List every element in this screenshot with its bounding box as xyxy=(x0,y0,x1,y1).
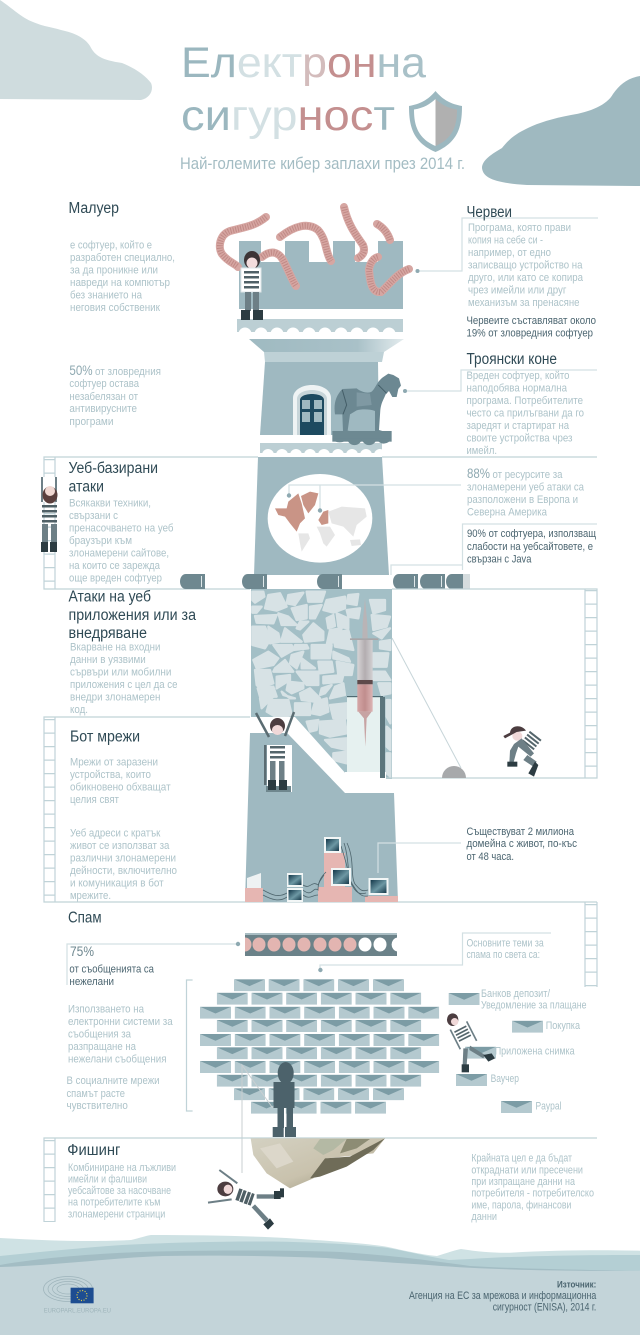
world map xyxy=(268,474,372,563)
text: web attacks: браузъри към xyxy=(69,535,132,547)
person on battlements xyxy=(241,251,263,320)
connector: 75 percent xyxy=(67,942,240,985)
text: 75 percent: от съобщенията са xyxy=(69,964,155,976)
text: 50 percent undetected: 50% xyxy=(69,362,93,378)
text: spam description: електронни системи за xyxy=(68,1016,173,1028)
tower: window and trojan horse floor xyxy=(249,339,404,461)
text: botnets: Уеб адреси с кратък xyxy=(70,828,161,840)
text: worms: Червеи xyxy=(466,204,512,221)
text: 90 percent java: 90% от софтуера, използващ xyxy=(467,528,596,540)
text: web application attacks: внедри злонамерен xyxy=(70,692,160,704)
legend: spam themes: Paypal xyxy=(536,1100,562,1112)
connector: map xyxy=(287,485,461,513)
text: web application attacks: внедряване xyxy=(68,625,147,642)
text: 90 percent java: свързан с Java xyxy=(467,554,532,566)
title xyxy=(181,39,426,140)
icon: trojan horse xyxy=(332,374,401,445)
text: worms: копия на себе си - xyxy=(468,235,543,247)
text: web application attacks: приложения с цел да се xyxy=(70,679,178,691)
text: malware: за да проникне или xyxy=(70,264,158,276)
text: spam themes: спама по света са: xyxy=(466,949,540,961)
connector: worms xyxy=(416,218,598,273)
tower: stone wall xyxy=(245,589,392,793)
text: spam description: разпращане на xyxy=(68,1041,137,1053)
text: botnets: обикновено обхващат xyxy=(70,782,171,794)
text: trojan horses: програма. Потребителите xyxy=(466,395,583,407)
text: 88 percent resources: от ресурсите за xyxy=(492,469,563,481)
icon: syringe xyxy=(350,598,378,747)
person on ladder upside down xyxy=(41,477,58,552)
text: 50 percent undetected: програми xyxy=(69,416,114,428)
text: web application attacks xyxy=(68,589,196,716)
text: web attacks xyxy=(68,460,174,585)
text: botnets: Мрежи от заразени xyxy=(70,757,158,769)
text: web attacks: пренасочването на уеб xyxy=(69,523,174,535)
text: worms: например, от едно xyxy=(468,247,551,259)
text: spam description: Използването на xyxy=(68,1004,145,1016)
text: web application attacks: Атаки на уеб xyxy=(68,589,151,606)
legend: spam themes: Уведомление за плащане xyxy=(481,1000,586,1012)
text: web application attacks: Вкарване на входни xyxy=(70,642,160,654)
pale panel xyxy=(347,696,385,778)
text: web attacks: свързани с xyxy=(69,510,118,522)
text: trojan horses xyxy=(466,351,584,457)
icon: shield xyxy=(409,91,462,152)
bullet row xyxy=(180,565,470,589)
connector: spam themes xyxy=(318,933,551,972)
text: botnets: Бот мрежи xyxy=(70,729,140,746)
text: phishing: на потребителите към xyxy=(68,1197,160,1209)
text: web attacks: още вреден софтуер xyxy=(69,573,162,585)
text: phishing: Комбиниране на лъжливи xyxy=(68,1162,176,1174)
tower: botnet floor xyxy=(245,712,398,902)
footer waves xyxy=(0,1235,640,1335)
frame: phishing xyxy=(44,1138,597,1222)
title: Електронна xyxy=(181,39,426,87)
computers and wires xyxy=(245,837,398,902)
text: phishing: Фишинг xyxy=(67,1142,121,1159)
icon: window xyxy=(293,385,331,435)
frame: botnets xyxy=(44,717,597,902)
text: worms: Програма, която прави xyxy=(468,222,571,234)
text: domains xyxy=(466,826,577,863)
text: 50 percent undetected: от зловредния xyxy=(95,366,161,378)
text: 50 percent undetected: антивирусните xyxy=(69,403,137,415)
text: phishing goal: потребителя - потребителско xyxy=(471,1188,594,1200)
running person xyxy=(503,726,543,777)
text: web application attacks: данни в уязвими xyxy=(70,654,146,666)
text: malware xyxy=(68,200,175,314)
text: botnets: и комуникация в бот xyxy=(70,878,164,890)
text: web attacks: на които се зарежда xyxy=(69,560,161,572)
text: web attacks: Уеб-базирани xyxy=(68,460,158,477)
text: trojan horses: Троянски коне xyxy=(466,351,557,368)
text: 50 percent undetected: софтуер остава xyxy=(69,378,140,390)
text: worms xyxy=(466,204,596,340)
text: phishing goal: данни xyxy=(471,1211,497,1223)
text: worms: друго, или като се копира xyxy=(468,272,584,284)
text: phishing goal: име, парола, финансови xyxy=(471,1199,571,1211)
text: botnets: мрежите. xyxy=(70,890,111,902)
legend: spam themes: Банков депозит/ xyxy=(481,988,551,1000)
text: spam description: спамът расте xyxy=(66,1088,125,1100)
text: 88 percent resources: 88% xyxy=(467,465,490,481)
legend: spam themes: Ваучер xyxy=(491,1073,519,1085)
text: spam description: нежелани съобщения xyxy=(68,1054,167,1066)
rock xyxy=(251,1138,385,1188)
text: worms: Червеите съставляват около xyxy=(466,315,596,327)
text: malware: е софтуер, който е xyxy=(70,240,152,252)
rope xyxy=(242,1065,273,1173)
text: worms: чрез имейли или друг xyxy=(468,284,566,296)
text: malware: Малуер xyxy=(68,200,119,217)
text: web application attacks: код. xyxy=(70,704,88,716)
text: trojan horses: своите устройства чрез xyxy=(466,433,572,445)
text: web application attacks: приложения или за xyxy=(68,607,196,624)
climbing person xyxy=(447,1013,495,1072)
title: сигурност xyxy=(181,92,395,140)
text: phishing xyxy=(67,1142,176,1220)
text: trojan horses: често са прилъгвани да го xyxy=(466,408,584,420)
text: source: сигурност (ENISA), 2014 г. xyxy=(493,1301,596,1313)
subtitle: Най-големите кибер заплахи през 2014 г. xyxy=(180,154,465,173)
logo: European Parliament xyxy=(44,1276,111,1314)
text: phishing goal: при изпращане данни на xyxy=(471,1176,576,1188)
text: trojan horses: имейл. xyxy=(466,445,497,457)
text: 90 percent java xyxy=(462,524,597,570)
envelope wall xyxy=(200,979,439,1114)
falling person xyxy=(208,1170,284,1230)
text: source xyxy=(409,1279,597,1313)
text: spam description xyxy=(66,1004,173,1112)
frame: web application attacks xyxy=(386,589,597,778)
text: botnets: различни злонамерени xyxy=(70,853,176,865)
connector: trojans xyxy=(403,370,597,393)
text: spam themes xyxy=(466,938,544,961)
text: domains: Съществуват 2 милиона xyxy=(466,826,575,838)
text: 50 percent undetected xyxy=(69,362,161,428)
text: web attacks: злонамерени сайтове, xyxy=(69,548,169,560)
bracket xyxy=(186,980,193,1111)
text: 88 percent resources: разположени в Европа и xyxy=(467,494,578,506)
text: malware: навреди на компютър xyxy=(70,277,170,289)
legend: spam themes: Приложена снимка xyxy=(495,1045,575,1057)
text: domains: от 48 часа. xyxy=(466,851,514,863)
text: spam description: В социалните мрежи xyxy=(66,1075,160,1087)
text: 75 percent: 75% xyxy=(70,943,94,959)
text: web attacks: атаки xyxy=(68,479,104,496)
worms xyxy=(220,207,409,292)
text: spam themes: Основните теми за xyxy=(466,938,544,950)
text: botnets: целия свят xyxy=(70,794,119,806)
person with raised arms xyxy=(256,712,294,792)
tower: battlements with worms xyxy=(220,207,409,340)
text: 75 percent xyxy=(69,943,155,988)
text: trojan horses: Вреден софтуер, който xyxy=(466,370,570,382)
legend: spam themes: Покупка xyxy=(546,1020,581,1032)
text: web attacks: Всякакви техники, xyxy=(69,498,151,510)
tower: map floor xyxy=(254,457,389,575)
connector: domains xyxy=(378,843,461,873)
text: 75 percent: нежелани xyxy=(69,976,114,988)
text: malware: разработен специално, xyxy=(70,252,175,264)
icon: stone weight xyxy=(442,766,466,778)
text: domains: домейна с живот, по-къс xyxy=(466,838,577,850)
text: botnets: дейности, включително xyxy=(70,865,177,877)
text: phishing goal: откраднати или пресечени xyxy=(471,1164,583,1176)
frame: spam ladder xyxy=(585,902,597,987)
text: 88 percent resources xyxy=(467,465,585,518)
chart: 75 percent pill bar xyxy=(245,933,397,956)
text: worms: механизъм за пренасяне xyxy=(468,297,580,309)
text: 88 percent resources: злонамерени уеб атаки са xyxy=(467,482,585,494)
text: phishing: имейли и фалшиви xyxy=(68,1174,147,1186)
text: 88 percent resources: Северна Америка xyxy=(467,506,548,518)
text: phishing goal: Крайната цел е да бъдат xyxy=(471,1153,572,1165)
text: malware: неговия собственик xyxy=(70,302,160,314)
text: worms: 19% от зловредния софтуер xyxy=(466,328,593,340)
legend: spam themes xyxy=(449,988,586,1113)
text: source: Агенция на ЕС за мрежова и информационна xyxy=(409,1290,597,1302)
text: phishing: уебсайтове за насочване xyxy=(68,1185,171,1197)
text: spam description: съобщения за xyxy=(68,1029,132,1041)
text: malware: без знанието на xyxy=(70,290,143,302)
text: spam description: чувствително xyxy=(66,1100,128,1112)
white diagonal xyxy=(245,717,347,793)
frame: web attacks xyxy=(44,457,597,589)
text: source: Източник: xyxy=(557,1279,596,1290)
logo: European Parliament: EUROPARL.EUROPA.EU xyxy=(44,1307,111,1314)
text: trojan horses: заредят и стартират на xyxy=(466,420,570,432)
text: botnets xyxy=(70,729,177,902)
text: botnets: живот се използват за xyxy=(70,840,170,852)
text: 90 percent java: слабости на уебсайтовете, е xyxy=(467,541,593,553)
cloud: top right xyxy=(482,76,640,186)
text: phishing: злонамерени страници xyxy=(68,1208,165,1220)
text: trojan horses: наподобява нормална xyxy=(466,383,568,395)
standing dark figure xyxy=(273,1062,296,1137)
text: worms: записващо устройство на xyxy=(468,260,583,272)
text: phishing goal xyxy=(471,1153,594,1223)
text: botnets: устройства, които xyxy=(70,769,151,781)
text: 50 percent undetected: незабелязан от xyxy=(69,391,138,403)
cloud: top left xyxy=(0,0,152,100)
text: web application attacks: сървъри или мобилни xyxy=(70,667,171,679)
heading: spam: Спам xyxy=(68,910,102,927)
